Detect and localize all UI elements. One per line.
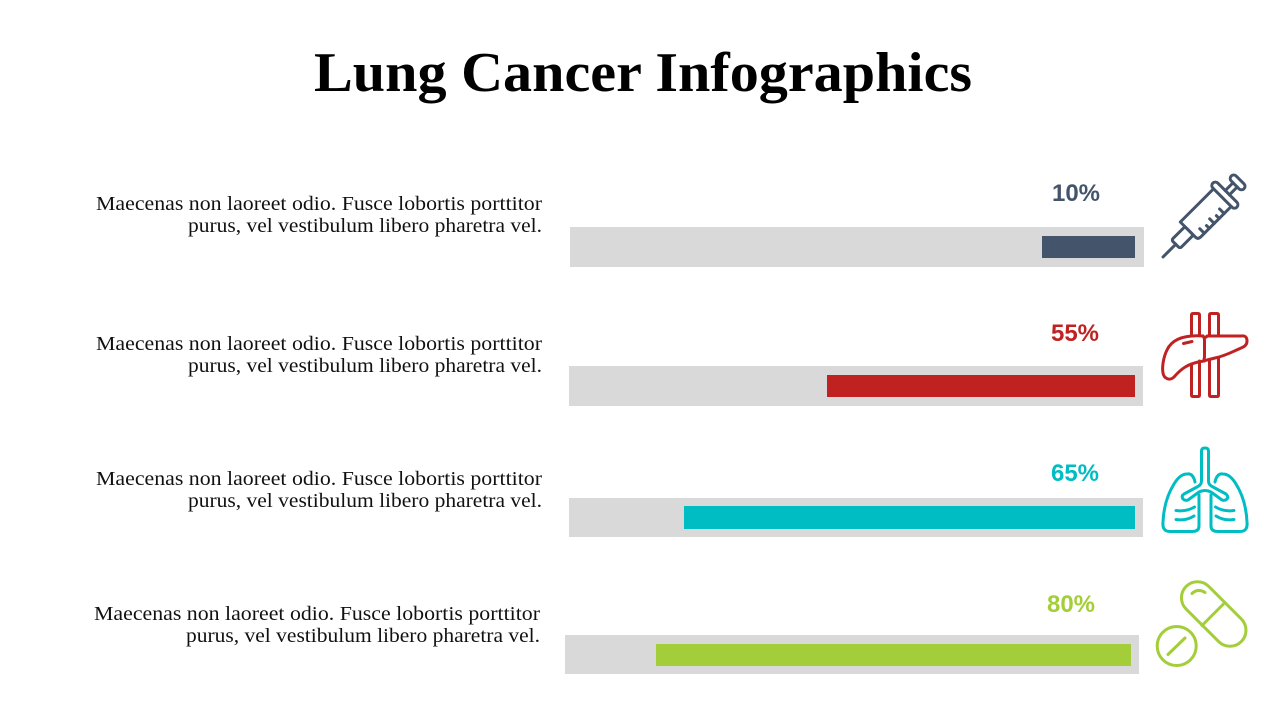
icon: pills: [1157, 575, 1253, 666]
value 65%: 65%: [1051, 460, 1099, 487]
description text 2: [96, 333, 542, 377]
description text 2: purus, vel vestibulum libero pharetra vel.: [188, 355, 542, 377]
description text 1: Maecenas non laoreet odio. Fusce lobortis porttitor: [96, 193, 542, 215]
bar 80%: [565, 635, 1139, 674]
icon: lungs: [1163, 448, 1247, 532]
row: 55% liver: [96, 314, 1247, 406]
description text 3: purus, vel vestibulum libero pharetra vel.: [188, 490, 542, 512]
value 55%: 55%: [1051, 320, 1099, 347]
description text 4: [94, 603, 540, 647]
row: 10% syringe: [96, 168, 1252, 269]
bar 65%: [569, 498, 1143, 537]
description text 4: Maecenas non laoreet odio. Fusce lobortis porttitor: [94, 603, 540, 625]
description text 4: purus, vel vestibulum libero pharetra vel.: [186, 625, 540, 647]
title: Lung Cancer Infographics: [314, 42, 972, 104]
icon: syringe: [1151, 168, 1252, 269]
value 10%: 10%: [1052, 180, 1100, 207]
bar 10%: [570, 227, 1144, 267]
icon: liver: [1163, 314, 1247, 396]
description text 1: purus, vel vestibulum libero pharetra vel.: [188, 215, 542, 237]
row: 65% lungs: [96, 448, 1247, 537]
row: 80% pills: [94, 575, 1253, 674]
description text 3: Maecenas non laoreet odio. Fusce lobortis porttitor: [96, 468, 542, 490]
bar 55%: [569, 366, 1143, 406]
description text 1: [96, 193, 542, 237]
value 80%: 80%: [1047, 591, 1095, 618]
description text 3: [96, 468, 542, 512]
description text 2: Maecenas non laoreet odio. Fusce lobortis porttitor: [96, 333, 542, 355]
